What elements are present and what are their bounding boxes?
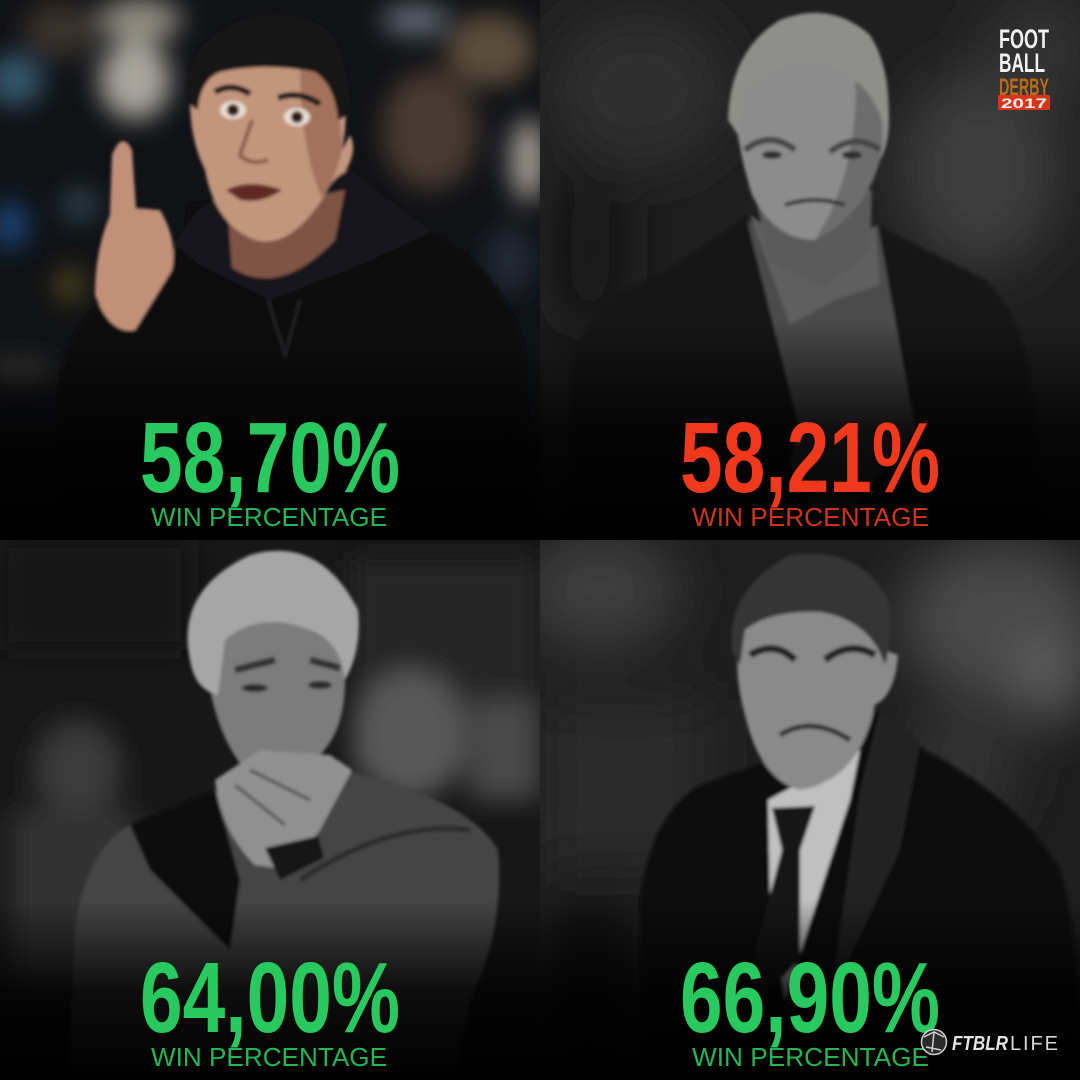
panel: Xavi, top left <box>0 0 540 420</box>
stat: Koeman win percentage: 58,21% <box>680 402 940 514</box>
sweater <box>75 770 500 1002</box>
bottom fade <box>0 900 540 1080</box>
stat: Xavi win percentage: WIN PERCENTAGE <box>151 502 387 532</box>
icon: football <box>922 1030 946 1054</box>
hair <box>187 37 349 122</box>
stat: Xavi win percentage <box>140 402 400 532</box>
logo: FTBLR Life: LIFE <box>1010 1033 1058 1055</box>
panel: Setien, bottom left <box>0 540 540 1080</box>
hair <box>731 553 891 665</box>
hand <box>215 750 352 870</box>
logo: Football Derby 2017: FOOT <box>999 24 1049 54</box>
stat: Valverde win percentage: 66,90% <box>680 942 940 1054</box>
shirt and tie <box>768 750 860 1000</box>
shirt <box>746 220 914 457</box>
stat: Valverde win percentage <box>680 942 940 1072</box>
stat: Setien win percentage: WIN PERCENTAGE <box>151 1042 387 1072</box>
stat: Setien win percentage <box>140 942 400 1072</box>
jacket <box>639 711 1075 962</box>
logo: Football Derby 2017 <box>998 24 1050 111</box>
hair <box>728 13 889 135</box>
stat: Koeman win percentage: WIN PERCENTAGE <box>692 502 929 532</box>
panel: Koeman, top right <box>540 0 1080 482</box>
Valverde figure <box>639 553 1075 999</box>
bottom fade <box>0 366 540 540</box>
stat: Setien win percentage: 64,00% <box>140 942 400 1054</box>
stat: Valverde win percentage: WIN PERCENTAGE <box>692 1042 929 1072</box>
blurred background <box>540 540 1080 952</box>
logo: FTBLR Life: FTBLR <box>952 1033 1008 1055</box>
bottom fade <box>540 320 1080 540</box>
blurred crowd background <box>0 0 546 382</box>
logo: Football Derby 2017: 2017 <box>1001 95 1047 111</box>
eyes, brows, mouth <box>215 87 320 201</box>
hoodie body <box>60 198 526 382</box>
blurred background <box>554 0 1080 305</box>
logo: FTBLR Life <box>922 1030 1058 1055</box>
bottom fade <box>540 900 1080 1080</box>
jacket <box>582 218 1026 362</box>
head <box>737 590 898 790</box>
stat: Koeman win percentage <box>680 402 940 532</box>
neck <box>228 190 345 278</box>
hair <box>188 551 359 695</box>
Xavi figure <box>60 64 526 382</box>
head <box>190 39 353 242</box>
raised hand with finger <box>95 141 174 331</box>
stat: Xavi win percentage: 58,70% <box>140 402 400 514</box>
panel: Valverde, bottom right <box>540 540 1080 1000</box>
head <box>735 38 889 240</box>
watch <box>265 836 324 880</box>
neck <box>755 190 872 288</box>
logo: Football Derby 2017: BALL <box>999 48 1045 78</box>
Setien figure <box>75 548 500 1002</box>
blurred background <box>0 540 540 990</box>
head <box>205 610 345 775</box>
Koeman figure <box>582 10 1026 438</box>
